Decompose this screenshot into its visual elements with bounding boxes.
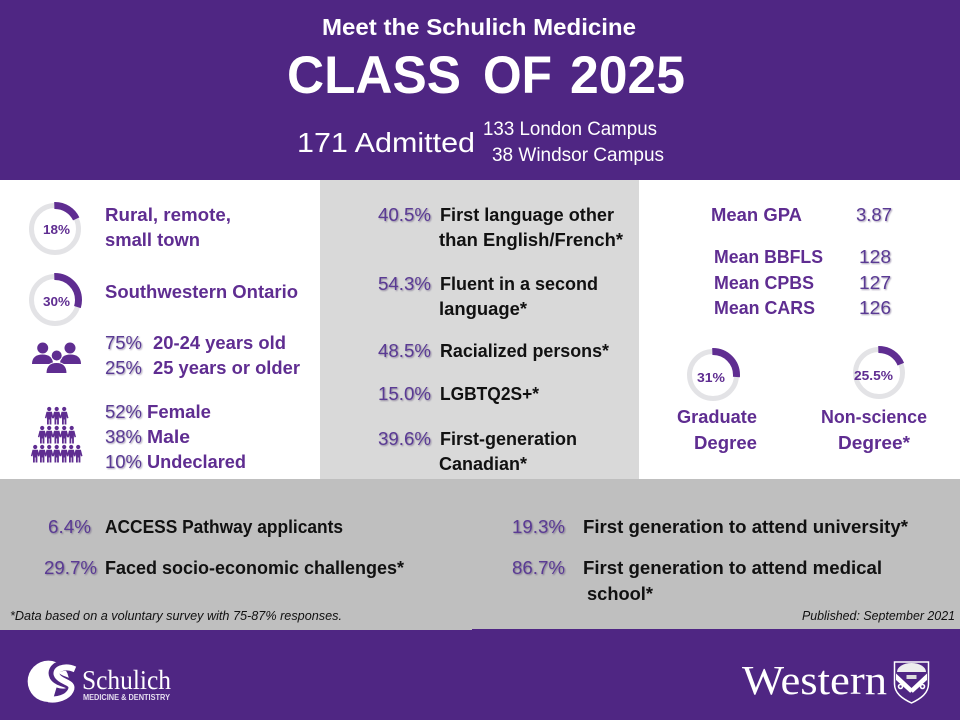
title: OF: [483, 46, 552, 105]
stat: mean bbfls: Mean BBFLS: [714, 247, 823, 267]
icon: three people: [32, 342, 81, 374]
stat: first language: 40.5%: [378, 205, 431, 225]
stat: second language: 54.3%: [378, 274, 431, 294]
stat: lgbtq: 15.0%: [378, 384, 431, 404]
label: southwestern ontario: Southwestern Ontario: [105, 282, 298, 302]
stat: age: 25%: [105, 358, 142, 378]
stat: access pathway: 6.4%: [48, 517, 91, 537]
stat: mean cpbs: 127: [859, 273, 891, 293]
donut: 25.5% non-science degree: 25.5%: [854, 368, 893, 383]
panel: header: [0, 0, 960, 180]
stat: gender: 38%: [105, 427, 142, 447]
icon: crowd: [31, 407, 82, 462]
london campus: 133 London Campus: [483, 119, 657, 140]
donut: 31% graduate degree: 31%: [697, 370, 725, 385]
panel: right academics: [677, 205, 927, 453]
stat: first language: First language other: [440, 205, 614, 225]
stat: first generation university: First generation to attend university*: [583, 517, 908, 537]
donut: 18% rural: [32, 206, 78, 252]
stat: gender: Female: [147, 402, 211, 422]
label: graduate degree: [677, 407, 757, 453]
logo: schulich: MEDICINE & DENTISTRY: [83, 693, 171, 702]
stat: age: 25 years or older: [153, 358, 300, 378]
stat: mean cars: 126: [859, 298, 891, 318]
stat: gender: Male: [147, 427, 190, 447]
icon: western shield: [894, 662, 928, 703]
donut: 30% southwestern ontario: [32, 276, 78, 324]
stat: first language: [378, 205, 623, 250]
stat: second language: Fluent in a second: [440, 274, 598, 294]
stat: mean cars: [714, 298, 891, 318]
stat: racialized: Racialized persons*: [440, 341, 609, 361]
label: graduate degree: Graduate: [677, 407, 757, 427]
stat: age: 75%: [105, 333, 142, 353]
panel: bottom statistics: [10, 517, 955, 623]
stat: gender: 10%: [105, 452, 142, 472]
title: CLASS: [287, 46, 461, 105]
donut: 31% graduate degree: [690, 352, 736, 398]
title: [287, 46, 685, 105]
stat: second language: [378, 274, 598, 319]
panel: centre statistics: [378, 205, 623, 474]
stat: gender: Undeclared: [147, 452, 246, 472]
stat: mean bbfls: [714, 247, 891, 267]
stat: first-generation canadian: 39.6%: [378, 429, 431, 449]
stat: gender: 52%: [105, 402, 142, 422]
stat: lgbtq: [378, 384, 539, 404]
windsor campus: 38 Windsor Campus: [492, 145, 664, 166]
stat: first-generation canadian: [378, 429, 577, 474]
stat: mean bbfls: 128: [859, 247, 891, 267]
panel: footer: [0, 629, 960, 720]
stat: mean gpa: 3.87: [856, 205, 892, 225]
stat: mean cpbs: [714, 273, 891, 293]
stat: lgbtq: LGBTQ2S+*: [440, 384, 539, 404]
stat: first generation medical school: school*: [587, 584, 653, 604]
stat: racialized: 48.5%: [378, 341, 431, 361]
stat: mean gpa: Mean GPA: [711, 205, 802, 225]
panel: centre grey: [320, 180, 639, 479]
admitted total: 171 Admitted: [297, 127, 475, 158]
stat: socio-economic: Faced socio-economic challenges*: [105, 558, 404, 578]
panel: bottom grey: [0, 479, 960, 630]
donut: 30% southwestern ontario: 30%: [43, 294, 70, 309]
donut: 25.5% non-science degree: [854, 350, 902, 396]
logo: western: Western: [742, 657, 887, 703]
label: rural: [105, 205, 231, 250]
publication date: Published: September 2021: [802, 609, 955, 623]
label: non-science degree: Degree*: [838, 433, 910, 453]
stat: age: 20-24 years old: [153, 333, 286, 353]
logo: schulich: Schulich: [82, 665, 171, 695]
title: 2025: [570, 46, 685, 105]
stat: mean cars: Mean CARS: [714, 298, 815, 318]
footnote: *Data based on a voluntary survey with 75-87% responses.: [10, 609, 342, 623]
stat: mean cpbs: Mean CPBS: [714, 273, 814, 293]
stat: first generation medical school: 86.7%: [512, 558, 565, 578]
donut: 18% rural: 18%: [43, 222, 70, 237]
panel: left demographics: [31, 205, 300, 472]
icon: schulich emblem: [28, 661, 78, 702]
logo: schulich: [28, 661, 171, 702]
stat: age: [105, 333, 300, 378]
stat: first generation medical school: [512, 558, 882, 604]
stat: socio-economic: 29.7%: [44, 558, 97, 578]
stat: first generation university: 19.3%: [512, 517, 565, 537]
stat: first language: than English/French*: [439, 230, 623, 250]
label: rural: small town: [105, 230, 200, 250]
stat: first-generation canadian: First-generation: [440, 429, 577, 449]
heading: meet the: Meet the Schulich Medicine: [322, 14, 636, 40]
label: non-science degree: [821, 407, 927, 453]
stat: first-generation canadian: Canadian*: [439, 454, 527, 474]
stat: second language: language*: [439, 299, 527, 319]
stat: access pathway: ACCESS Pathway applicants: [105, 517, 343, 537]
stat: gender: [105, 402, 246, 472]
label: rural: Rural, remote,: [105, 205, 231, 225]
stat: first generation medical school: First generation to attend medical: [583, 558, 882, 578]
label: non-science degree: Non-science: [821, 407, 927, 427]
stat: mean gpa: [711, 205, 892, 225]
label: graduate degree: Degree: [694, 433, 757, 453]
